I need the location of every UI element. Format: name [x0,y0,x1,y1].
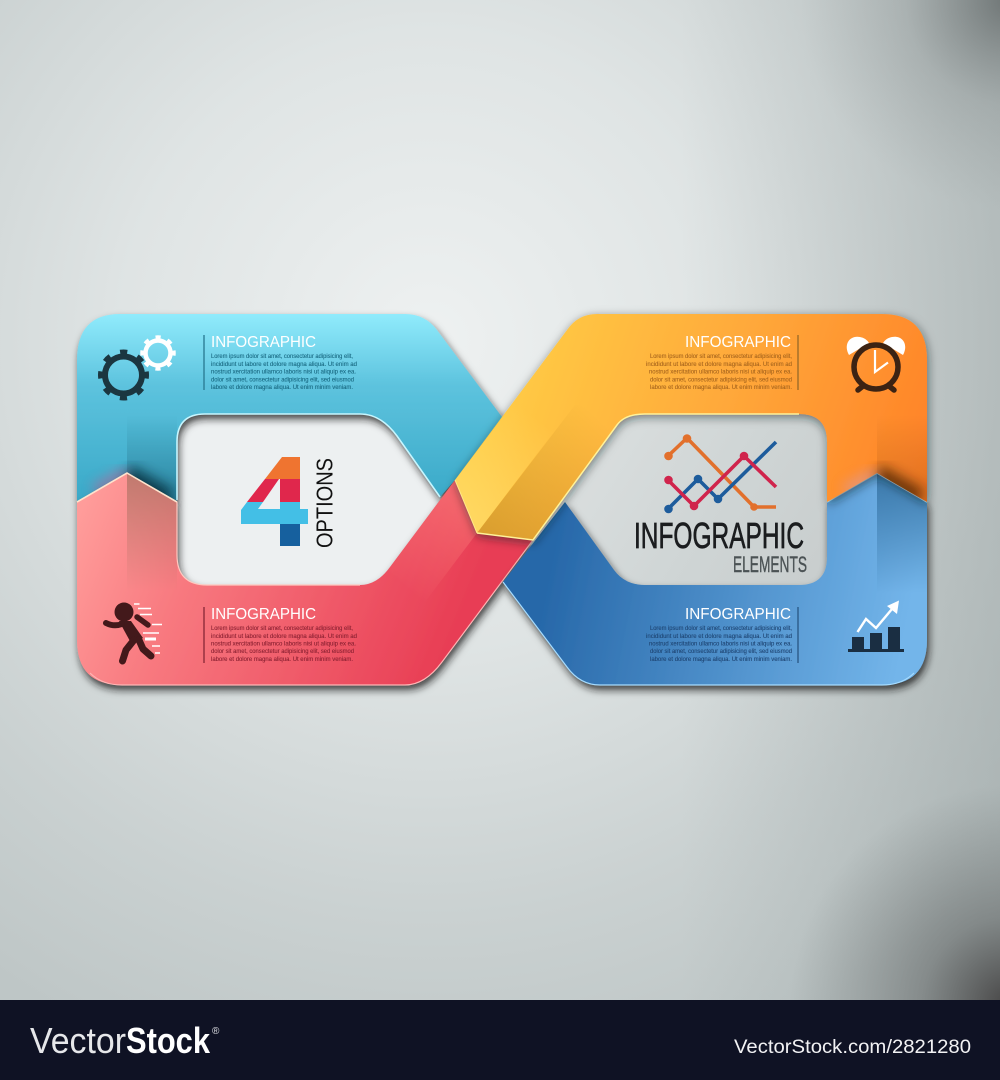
text block: cyan: labore et dolore magna aliqua. Ut enim minim veniam. [211,385,353,391]
icon: bar chart with arrow [848,600,904,652]
heading: INFOGRAPHIC ELEMENTS [634,515,807,577]
text block: blue: Lorem ipsum dolor sit amet, consectetur adipisicing elit, [650,626,792,632]
text block: blue: incididunt ut labore et dolore magna aliqua. Ut enim ad [646,634,792,640]
text block: cyan: incididunt ut labore et dolore magna aliqua. Ut enim ad [211,362,357,368]
panel: red band [77,473,533,685]
text block: blue: labore et dolore magna aliqua. Ut enim minim veniam. [650,657,792,663]
text block: cyan: nostrud xercitation ullamco laboris nisi ut aliquip ex ea. [211,370,356,376]
text block: blue: nostrud xercitation ullamco laboris nisi ut aliquip ex ea. [649,642,792,648]
footer bar: ® [212,1026,220,1037]
text block: red: dolor sit amet, consectetur adipisicing elit, sed eiusmod [211,649,354,655]
text block: orange: dolor sit amet, consectetur adipisicing elit, sed eiusmod [650,378,792,384]
text block: blue: INFOGRAPHIC [685,606,791,623]
footer bar: Stock [126,1020,211,1061]
text block: red: nostrud xercitation ullamco laboris nisi ut aliquip ex ea. [211,642,356,648]
numeral: big 4 [241,457,308,546]
panel: cyan band [77,314,502,505]
panel: yellow-orange band [455,314,927,540]
text block: orange [646,334,799,391]
footer bar: Vector [30,1020,126,1061]
text block: red: labore et dolore magna aliqua. Ut enim minim veniam. [211,657,353,663]
text block: orange: incididunt ut labore et dolore magna aliqua. Ut enim ad [646,362,792,368]
text block: red: Lorem ipsum dolor sit amet, consectetur adipisicing elit, [211,626,353,632]
text block: red: INFOGRAPHIC [211,606,316,623]
heading: INFOGRAPHIC ELEMENTS: ELEMENTS [733,552,807,577]
text block: blue [646,606,799,663]
text block: orange: Lorem ipsum dolor sit amet, consectetur adipisicing elit, [650,354,792,360]
footer bar [0,1000,1000,1080]
panel: left centre window [177,414,441,585]
text block: orange: INFOGRAPHIC [685,334,791,351]
text block: blue: dolor sit amet, consectetur adipisicing elit, sed eiusmod [650,649,792,655]
text block: cyan [203,334,357,391]
icon: alarm clock [847,337,905,390]
text block: cyan: dolor sit amet, consectetur adipisicing elit, sed eiusmod [211,378,354,384]
panel: blue band [503,473,927,685]
text block: red [203,606,357,663]
text block: cyan: Lorem ipsum dolor sit amet, consectetur adipisicing elit, [211,354,353,360]
text block: red: incididunt ut labore et dolore magna aliqua. Ut enim ad [211,634,357,640]
line chart [666,436,776,512]
footer bar: VectorStock.com/2821280 [734,1037,971,1058]
icon: gears [101,338,174,398]
label: OPTIONS: OPTIONS [312,458,338,548]
text block: orange: labore et dolore magna aliqua. Ut enim minim veniam. [650,385,792,391]
panel: right centre window [565,414,827,585]
icon: running person [106,602,162,661]
text block: orange: nostrud xercitation ullamco laboris nisi ut aliquip ex ea. [649,370,792,376]
text block: cyan: INFOGRAPHIC [211,334,316,351]
heading: INFOGRAPHIC ELEMENTS: INFOGRAPHIC [634,515,804,556]
